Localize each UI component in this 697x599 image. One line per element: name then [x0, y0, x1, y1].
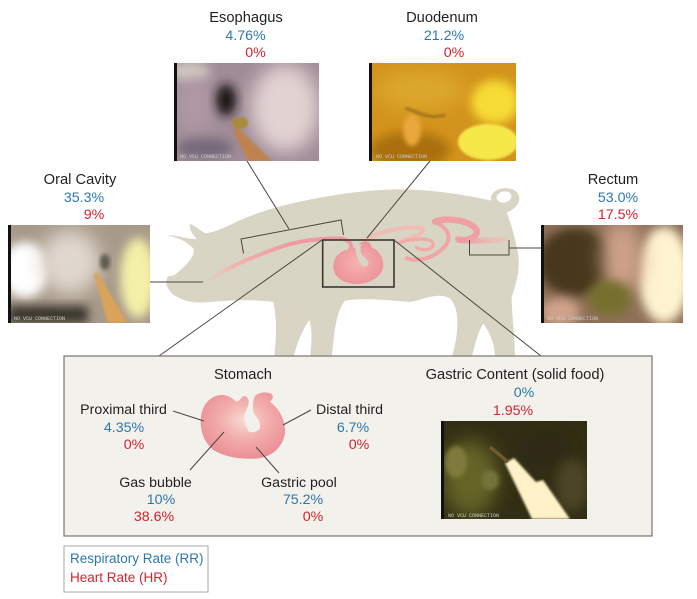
proximal third leader — [173, 411, 204, 421]
photo: duodenum: NO VCU CONNECTION — [376, 154, 427, 160]
photo: gastric content: NO VCU CONNECTION — [448, 513, 499, 519]
legend item: respiratory rate: Respiratory Rate (RR) — [70, 551, 204, 566]
photo: rectum — [541, 225, 683, 323]
title and values: duodenum: 0% — [444, 45, 465, 61]
title and values: esophagus: Esophagus — [209, 10, 283, 26]
heading: Stomach: Stomach — [214, 367, 272, 383]
photo: oral cavity: NO VCU CONNECTION — [14, 316, 65, 322]
label: gas bubble: Gas bubble — [119, 475, 192, 491]
title and values: rectum: Rectum — [588, 172, 638, 188]
photo: oral cavity — [1, 225, 156, 323]
intestine tract — [365, 220, 507, 260]
label: gastric pool: 0% — [303, 509, 324, 525]
legend — [64, 546, 208, 592]
label: distal third: Distal third — [316, 402, 383, 418]
label: gastric content: Gastric Content (solid food) — [426, 367, 604, 383]
rectum bracket and connector — [470, 240, 541, 255]
label: distal third: 0% — [349, 437, 370, 453]
label: gastric content: 1.95% — [493, 403, 533, 419]
title and values: oral cavity — [44, 172, 117, 223]
panel: stomach detail — [64, 356, 652, 536]
title and values: oral cavity: Oral Cavity — [44, 172, 117, 188]
title and values: duodenum — [406, 10, 478, 61]
title and values: rectum: 53.0% — [598, 190, 638, 206]
title and values: rectum: 17.5% — [598, 207, 638, 223]
label: gastric pool — [261, 475, 337, 525]
label: gastric content: 0% — [514, 385, 535, 401]
duodenum connector — [367, 161, 430, 238]
esophagus bracket and connector — [241, 161, 344, 254]
title and values: oral cavity: 9% — [84, 207, 105, 223]
title and values: oral cavity: 35.3% — [64, 190, 104, 206]
label: proximal third: Proximal third — [80, 402, 167, 418]
label: gastric pool: 75.2% — [283, 492, 323, 508]
title and values: esophagus: 4.76% — [225, 28, 266, 44]
photo: duodenum — [369, 63, 519, 168]
gastric pool leader — [256, 447, 279, 473]
label: gastric content — [426, 367, 604, 419]
legend item: heart rate: Heart Rate (HR) — [70, 570, 168, 585]
distal third leader — [283, 410, 311, 425]
title and values: duodenum: Duodenum — [406, 10, 478, 26]
small stomach in pig — [333, 241, 383, 284]
title and values: esophagus — [209, 10, 283, 61]
large stomach illustration — [201, 392, 285, 459]
label: distal third — [316, 402, 383, 453]
zoom lines from box to panel — [159, 240, 541, 356]
photo: esophagus: NO VCU CONNECTION — [180, 154, 231, 160]
zoom box on stomach — [323, 240, 394, 287]
photo: gastric content — [441, 421, 588, 519]
oral cavity connector — [150, 281, 203, 283]
photo: esophagus — [170, 62, 319, 161]
title and values: duodenum: 21.2% — [424, 28, 464, 44]
esophagus tract — [210, 238, 351, 280]
label: proximal third — [80, 402, 167, 453]
label: gas bubble: 10% — [147, 492, 176, 508]
gas bubble leader — [190, 432, 224, 470]
label: gas bubble: 38.6% — [134, 509, 174, 525]
label: proximal third: 0% — [124, 437, 145, 453]
title and values: rectum — [588, 172, 638, 223]
title and values: esophagus: 0% — [245, 45, 266, 61]
label: proximal third: 4.35% — [104, 420, 144, 436]
photo: rectum: NO VCU CONNECTION — [547, 316, 598, 322]
label: gastric pool: Gastric pool — [261, 475, 337, 491]
pig silhouette — [166, 188, 519, 358]
label: distal third: 6.7% — [337, 420, 370, 436]
label: gas bubble — [119, 475, 192, 525]
